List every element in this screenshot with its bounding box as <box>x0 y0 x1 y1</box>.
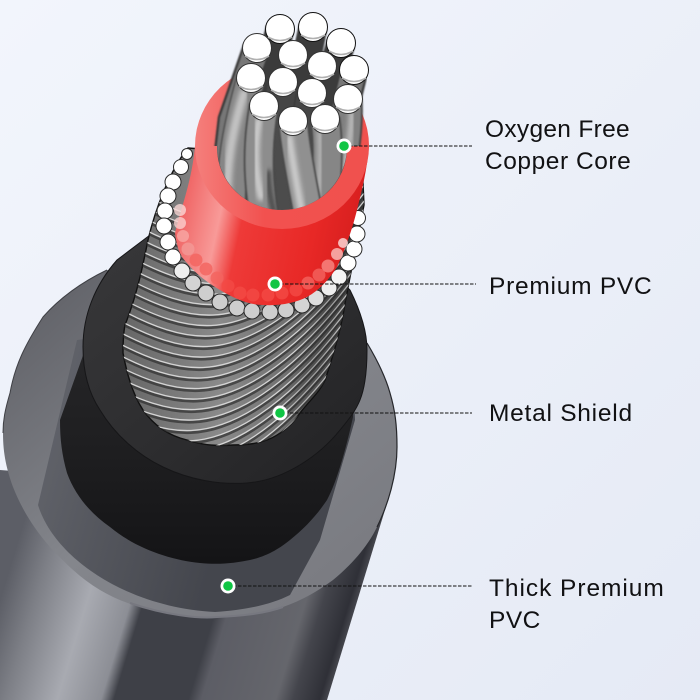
callout: thick premium PVC <box>220 575 665 634</box>
metal shield bead ring <box>156 148 366 320</box>
metal shield braid <box>122 147 365 446</box>
callout: oxygen free copper core: Copper Core <box>485 148 631 175</box>
callout: metal shield <box>272 400 633 427</box>
oxygen free copper core strands <box>224 12 368 235</box>
strand end caps <box>236 12 368 136</box>
callout: thick premium PVC: PVC <box>489 607 541 634</box>
callout: thick premium PVC: Thick Premium <box>489 575 665 602</box>
callout: oxygen free copper core <box>336 116 631 175</box>
callout: metal shield: Metal Shield <box>489 400 633 427</box>
callout: oxygen free copper core: Oxygen Free <box>485 116 630 143</box>
black inner jacket collar <box>60 235 367 564</box>
translucent outer jacket disk <box>3 270 397 617</box>
premium PVC red insulation tube <box>174 63 369 305</box>
cable outer body <box>0 470 388 700</box>
callout: premium PVC: Premium PVC <box>489 273 652 300</box>
callout: premium PVC <box>268 273 652 300</box>
